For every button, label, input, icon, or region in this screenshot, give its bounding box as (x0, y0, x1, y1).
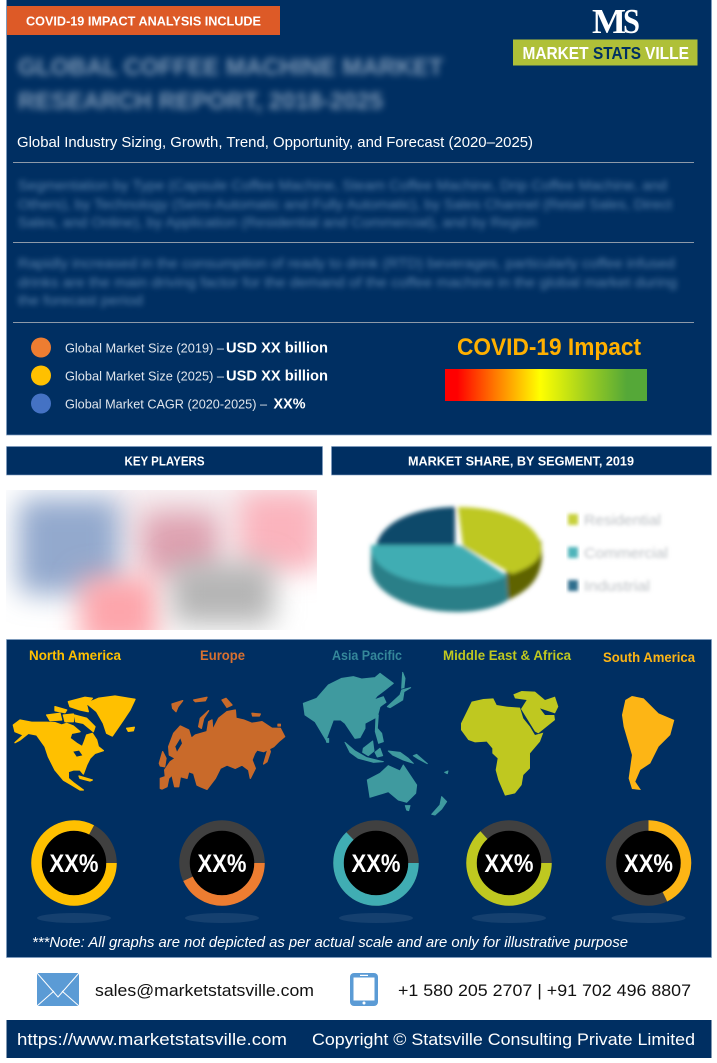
logo: market stats ville: S (623, 2, 640, 41)
text block: segmentation (blurred) (18, 178, 672, 230)
panel: key players logos (blurred) (6, 490, 317, 630)
stat: market size 2019 (31, 338, 328, 358)
stat: market size 2025 (31, 366, 328, 386)
legend: segments (blurred): Residential (584, 512, 661, 529)
heading: market share: MARKET SHARE, BY SEGMENT, 2019 (408, 454, 634, 468)
region: south america: South America (603, 650, 695, 665)
title (blurred): RESEARCH REPORT, 2018-2025 (18, 88, 383, 115)
heading: key players: KEY PLAYERS (124, 454, 204, 468)
donut: south america (611, 826, 686, 923)
donut: asia pacific: XX% (352, 850, 400, 878)
logo: market stats ville (513, 2, 698, 66)
heading: market share (332, 446, 712, 475)
donut: south america: XX% (624, 850, 673, 878)
contact: phone (350, 973, 691, 1006)
donut: north america: XX% (50, 850, 98, 878)
icon: envelope (37, 973, 79, 1006)
text block: market driver (blurred): drinks are the main driving factor for the demand of the coffee machine in the global market during (18, 275, 677, 290)
donut: europe (184, 826, 260, 923)
stat: market size 2019: USD XX billion (226, 340, 328, 356)
text block: market driver (blurred): Rapidly increased in the consumption of ready to drink (RTD) beverages, particularly coffee infused (18, 256, 675, 271)
stat: market size 2025: Global Market Size (2025) – (65, 370, 224, 384)
stat: market size 2025: USD XX billion (226, 368, 328, 384)
region: north america: North America (29, 648, 121, 663)
heading: key players (6, 446, 322, 475)
panel: report header (6, 0, 712, 435)
map: europe (159, 697, 285, 789)
logo: market stats ville: VILLE (645, 43, 689, 63)
banner: covid analysis (7, 6, 280, 35)
region: europe (159, 648, 285, 923)
region: south america (603, 650, 695, 923)
covid impact gradient scale (445, 369, 647, 401)
title (blurred): GLOBAL COFFEE MACHINE MARKET (18, 54, 443, 81)
legend: segments (blurred) (568, 512, 668, 595)
note: ***Note: All graphs are not depicted as per actual scale and are only for illustrative purpose (32, 935, 628, 951)
footer bar: Copyright © Statsville Consulting Private Limited (312, 1030, 695, 1049)
title (blurred) (18, 54, 443, 115)
region: north america (13, 648, 135, 923)
contact: email (37, 973, 314, 1006)
stat: market cagr (31, 394, 306, 414)
region: europe: Europe (200, 648, 245, 663)
donut: asia pacific (338, 826, 414, 923)
donut: middle east and africa: XX% (484, 850, 534, 878)
footer bar (6, 1020, 712, 1058)
map: middle east and africa (461, 691, 558, 796)
region: asia pacific (303, 648, 448, 923)
region: middle east and africa: Middle East & Africa (443, 648, 571, 663)
logo: market stats ville: STATS (593, 43, 641, 63)
text block: market driver (blurred): the forecast period (18, 293, 143, 308)
panel: regional analysis (6, 640, 712, 958)
banner: covid analysis: COVID-19 IMPACT ANALYSIS INCLUDE (26, 14, 261, 28)
icon: smartphone (350, 973, 378, 1006)
text block: segmentation (blurred): Sales, and Online), by Application (Residential and Commercial), and by Region (18, 215, 537, 230)
map: north america (13, 696, 135, 790)
map: south america (622, 696, 674, 790)
covid impact heading: COVID-19 Impact (457, 334, 641, 361)
footer bar: https://www.marketstatsville.com (17, 1030, 287, 1049)
donut: north america (36, 826, 112, 923)
region: asia pacific: Asia Pacific (332, 648, 402, 663)
donut: europe: XX% (198, 850, 246, 878)
legend: segments (blurred): Industrial (584, 578, 650, 595)
text block: segmentation (blurred): Segmentation by Type (Capsule Coffee Machine, Steam Coffee Machine, Drip Coffee Machine, and (18, 178, 667, 193)
contact: phone: +1 580 205 2707 | +91 702 496 8807 (398, 981, 691, 1000)
contact: email: sales@marketstatsville.com (95, 981, 314, 1000)
region: middle east and africa (443, 648, 571, 923)
logo: market stats ville: M (592, 2, 626, 41)
donut: middle east and africa (472, 826, 546, 923)
text block: segmentation (blurred): Others), by Technology (Semi-Automatic and Fully Automatic), by Sales Channel (Retail Sales, Direct (18, 197, 672, 212)
stat: market cagr: Global Market CAGR (2020-2025) – (65, 398, 267, 412)
chart: market share 3D pie (371, 507, 542, 612)
subtitle: Global Industry Sizing, Growth, Trend, Opportunity, and Forecast (2020–2025) (17, 135, 533, 151)
text block: market driver (blurred) (18, 256, 677, 308)
map: asia pacific (303, 672, 448, 815)
logo: market stats ville: MARKET (522, 43, 589, 63)
legend: segments (blurred): Commercial (584, 545, 668, 562)
stat: market size 2019: Global Market Size (2019) – (65, 342, 224, 356)
stat: market cagr: XX% (274, 396, 306, 412)
